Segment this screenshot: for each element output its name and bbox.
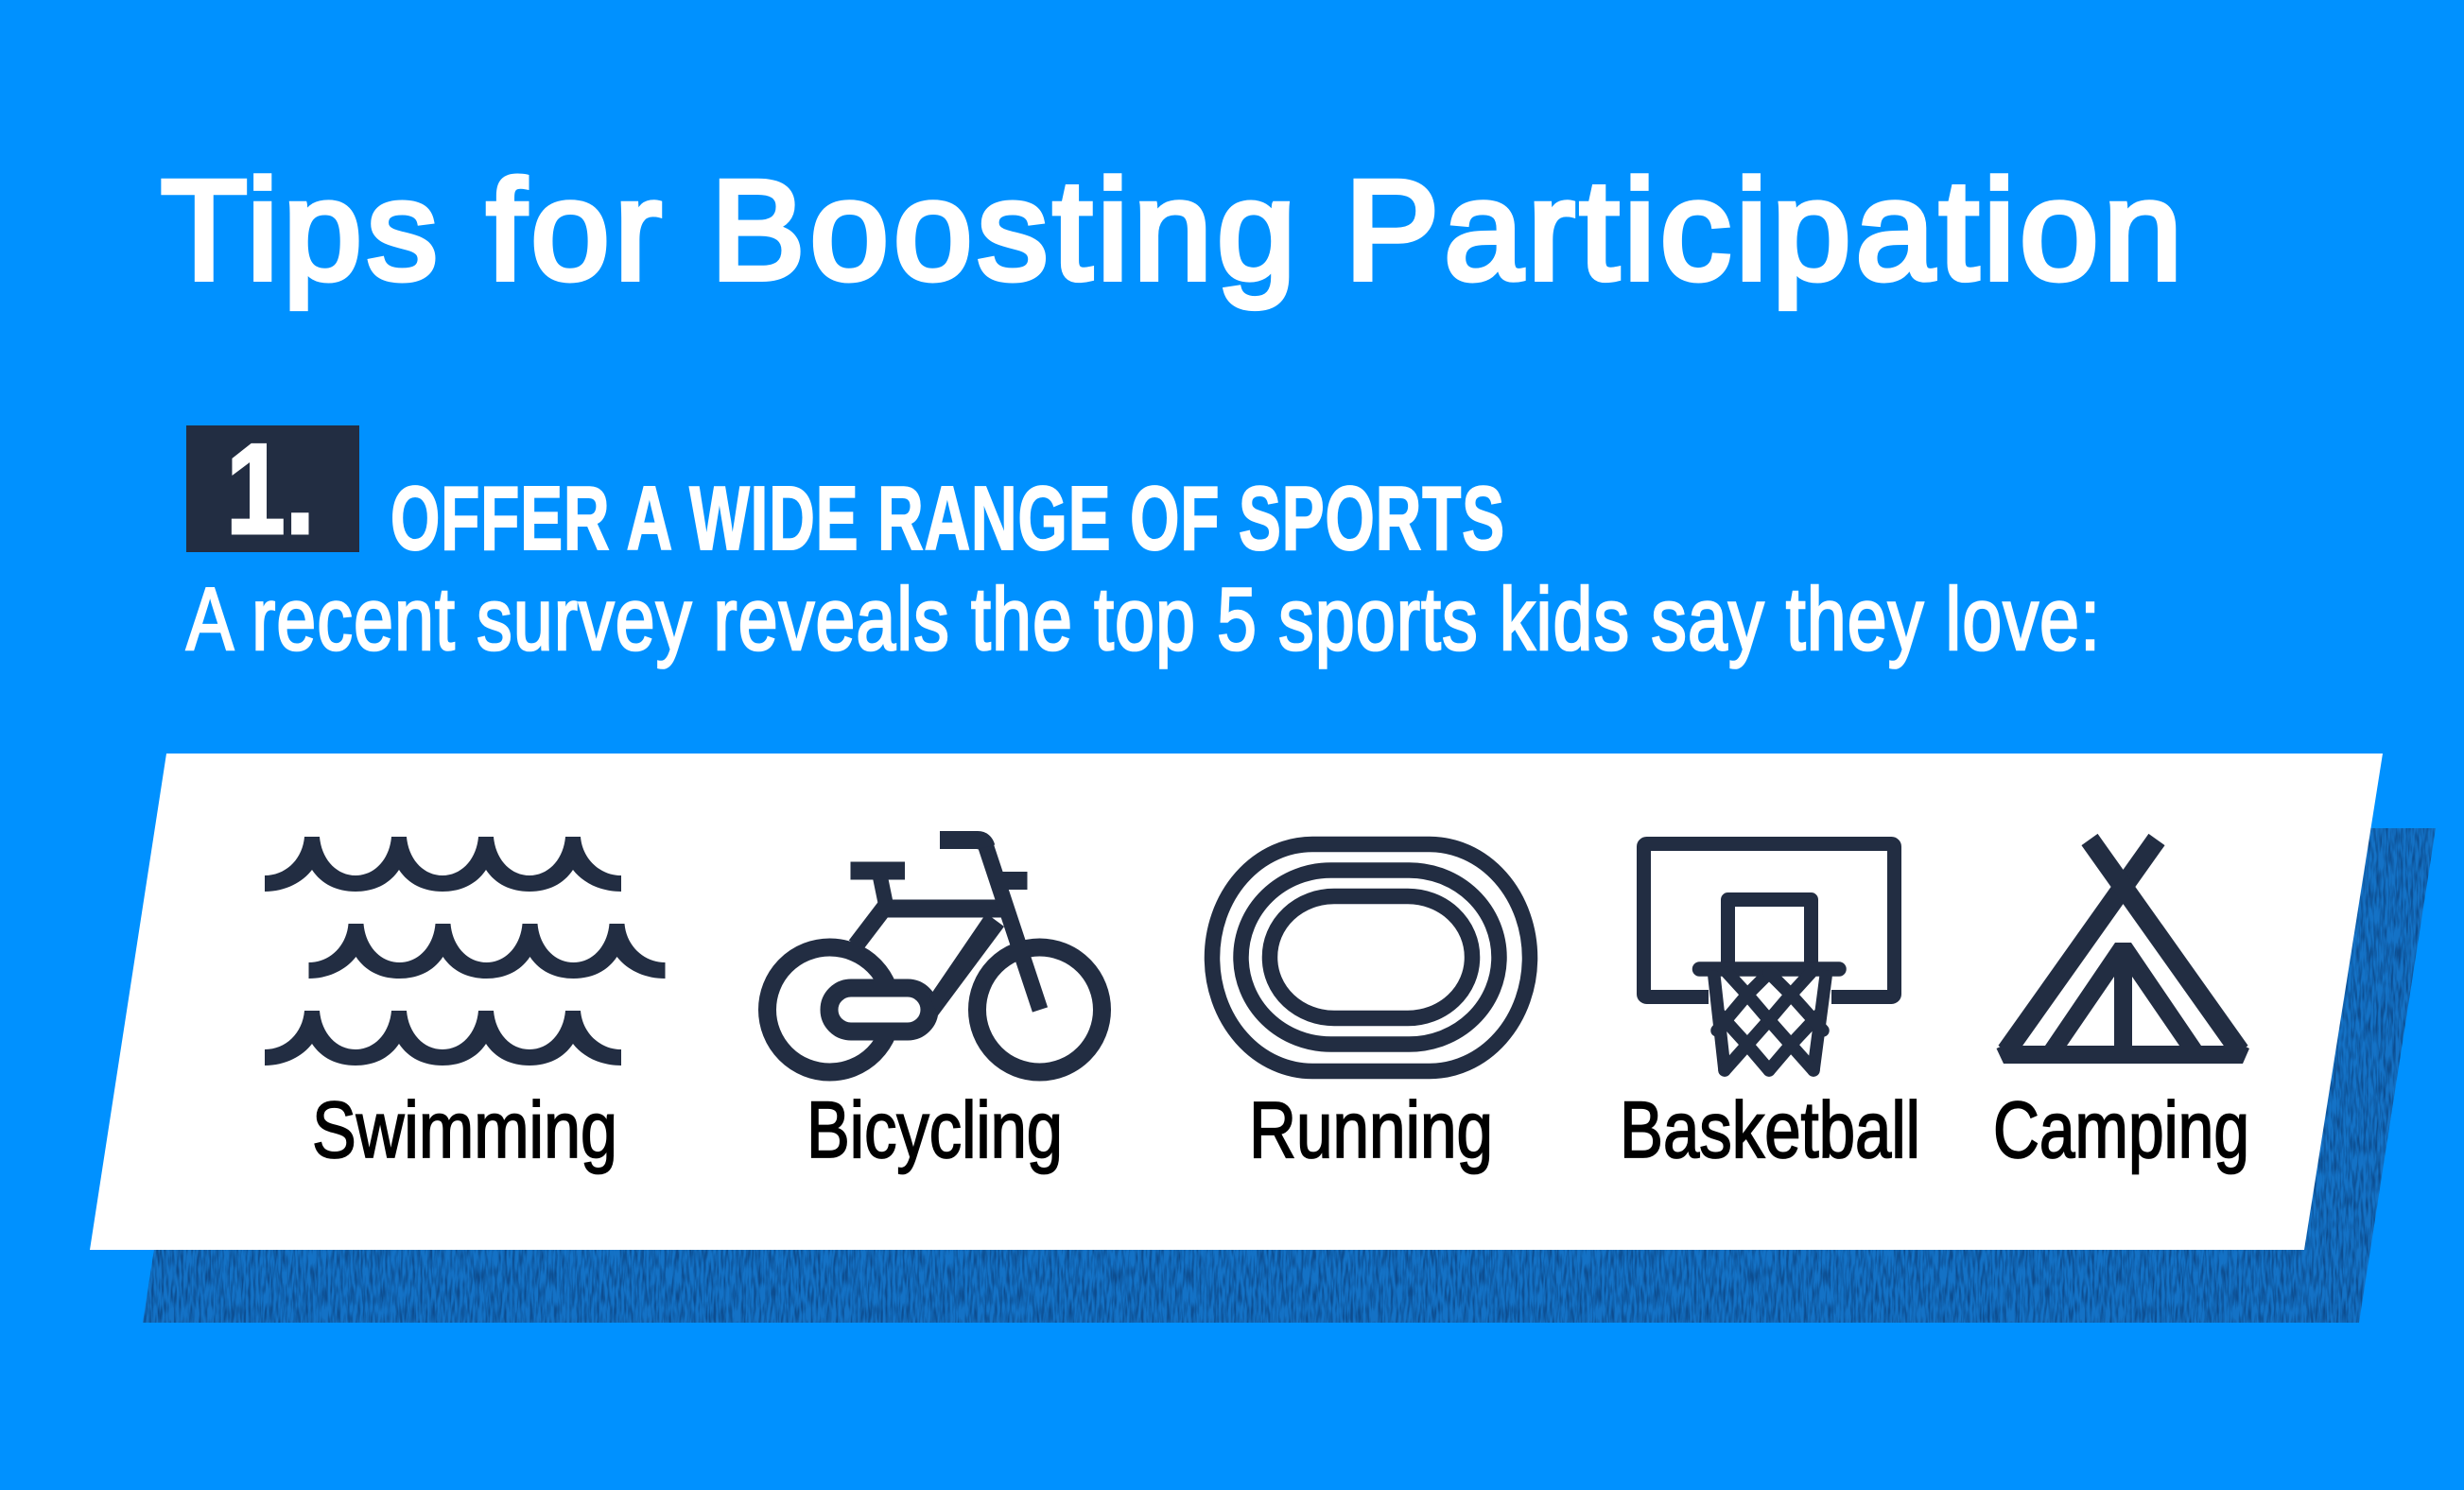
- heading: offer a wide range of sports: OFFER A WIDE RANGE OF SPORTS: [390, 467, 1504, 569]
- label: basketball: Basketball: [1620, 1085, 1920, 1174]
- panel: top 5 sports: [90, 754, 2383, 1250]
- number badge: 1.: [226, 417, 315, 561]
- icon: camping tent: [1997, 840, 2249, 1064]
- panel shadow: [143, 828, 2436, 1323]
- label: running: Running: [1249, 1085, 1493, 1174]
- label: bicycling: Bicycling: [807, 1085, 1063, 1174]
- icon: basketball hoop: [1643, 843, 1895, 1076]
- label: swimming: Swimming: [312, 1085, 617, 1174]
- icon: running track: [1212, 844, 1530, 1071]
- icon: bicycle: [768, 840, 1102, 1072]
- subheading text: A recent survey reveals the top 5 sports kids say they love:: [186, 570, 2100, 669]
- number badge: [186, 417, 359, 561]
- title: Tips for Boosting Participation: [161, 150, 2182, 309]
- label: camping: Camping: [1993, 1085, 2249, 1174]
- icon: swimming waves: [265, 837, 666, 1066]
